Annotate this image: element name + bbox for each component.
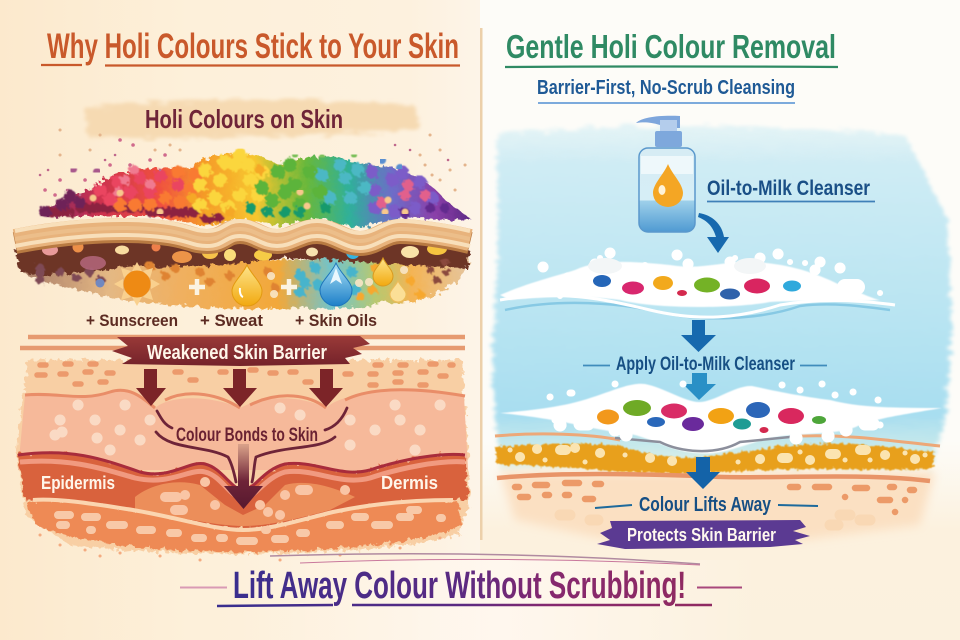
arrow: foam to step — [681, 320, 716, 352]
arrow: barrier right — [309, 369, 343, 407]
banner: Weakened Skin Barrier — [112, 336, 370, 366]
arrow: into skin — [224, 444, 263, 509]
subtitle: Barrier-First, No-Scrub Cleansing — [537, 77, 795, 99]
skin stripe and cells — [497, 474, 930, 525]
colour powder mound — [40, 130, 472, 228]
text: Oil-to-Milk Cleanser: Oil-to-Milk Cleanser — [707, 177, 870, 200]
title: left: Why Holi Colours Stick to Your Skin — [47, 27, 459, 66]
arrow: step to skin — [683, 373, 716, 400]
label: Dermis: Dermis — [381, 473, 438, 493]
water wash background — [492, 126, 952, 470]
banner: Weakened Skin Barrier: Weakened Skin Barrier — [147, 342, 327, 364]
ingredient labels: + Skin Oils — [295, 311, 377, 330]
foam: second — [500, 384, 942, 454]
middle skin cells — [55, 405, 440, 450]
ingredient labels — [86, 311, 377, 330]
upper skin cells — [37, 364, 453, 385]
icon: oil drops — [373, 258, 406, 302]
plus sign — [281, 279, 297, 295]
plus sign — [189, 279, 205, 295]
arrow: lifting through skin — [686, 457, 720, 489]
arrow: barrier left — [136, 369, 166, 406]
arrow: barrier centre — [223, 369, 257, 407]
foam: first — [500, 253, 895, 318]
ingredient labels: + Sweat — [200, 311, 263, 330]
text: Colour Bonds to Skin: Colour Bonds to Skin — [176, 425, 318, 446]
footer slogan: Lift Away Colour Without Scrubbing! — [233, 565, 686, 607]
lower skin layer — [26, 501, 462, 552]
icon: pump bottle — [636, 116, 695, 232]
powder and oils beneath skin — [15, 239, 470, 309]
footer slogan — [180, 554, 742, 607]
banner: Holi Colours on Skin — [85, 99, 420, 139]
skin cross-section — [16, 337, 470, 560]
second foam colour beads — [597, 400, 826, 433]
title: right: Gentle Holi Colour Removal — [506, 28, 836, 65]
bracket curves — [156, 408, 347, 482]
banner: Protects Skin Barrier — [597, 520, 810, 549]
panel: why Holi colours stick — [15, 27, 472, 560]
panel: gentle removal — [492, 28, 952, 549]
divider between panels — [480, 28, 482, 540]
skin band: orange — [495, 434, 940, 473]
label: Epidermis: Epidermis — [41, 473, 115, 493]
icon: water drop — [320, 263, 352, 306]
banner: Protects Skin Barrier: Protects Skin Barrier — [627, 525, 776, 545]
ingredient labels: + Sunscreen — [86, 311, 178, 330]
text: Apply Oil-to-Milk Cleanser: Apply Oil-to-Milk Cleanser — [616, 353, 795, 375]
banner: Holi Colours on Skin: Holi Colours on Skin — [145, 104, 343, 134]
first foam colour beads — [593, 275, 801, 300]
icon: sweat drop — [232, 265, 262, 306]
lower skin dots fade — [500, 472, 935, 540]
icon: sun — [114, 262, 160, 306]
skin surface band — [15, 220, 470, 248]
red dermis band — [18, 453, 468, 528]
arrow: curved to foam — [698, 213, 729, 253]
text: Colour Lifts Away: Colour Lifts Away — [639, 494, 772, 516]
